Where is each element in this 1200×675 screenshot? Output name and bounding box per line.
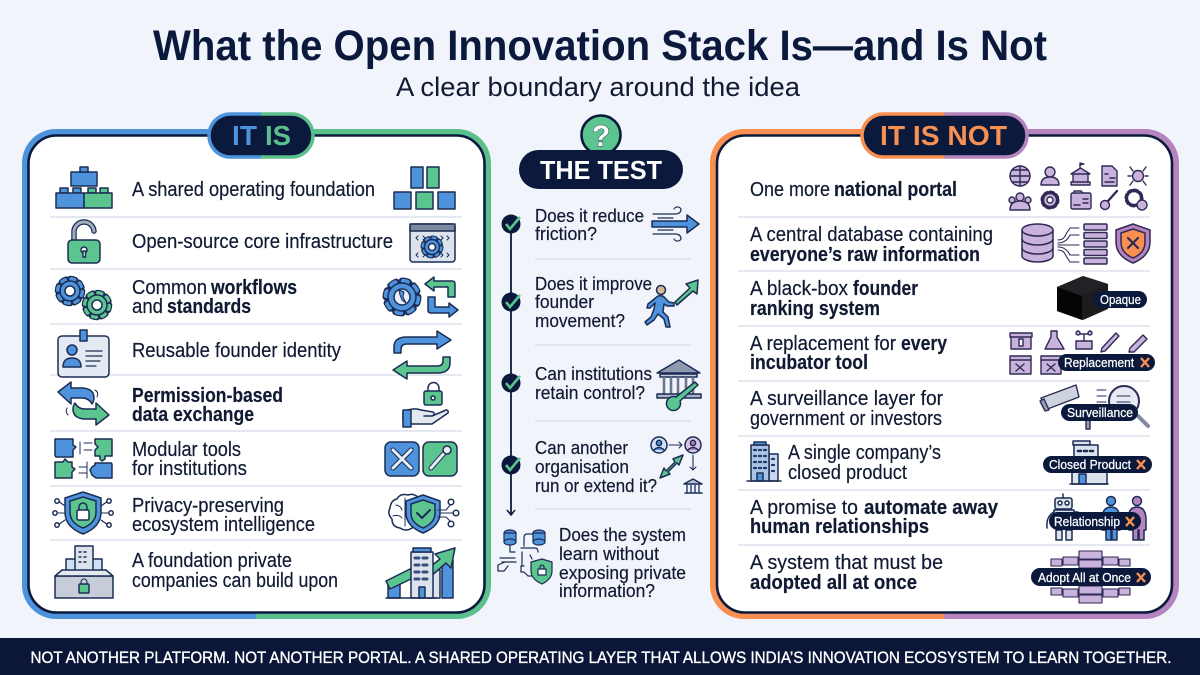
text: central database: everyone’s raw information <box>750 244 980 266</box>
icon: company tower <box>747 442 781 481</box>
icon: data flow to shield <box>498 530 552 584</box>
text: surveillance layer: A surveillance layer for <box>750 388 943 410</box>
heading: it is not: IT IS NOT <box>880 120 1007 151</box>
icon: bank with key <box>657 360 701 411</box>
icon: black box <box>1057 276 1108 320</box>
text: replacement for every tool: incubator tool <box>750 352 868 374</box>
icon: organisation handoff <box>651 437 702 493</box>
icon: founder id card <box>58 330 109 377</box>
icon: hand holding lock <box>403 382 448 427</box>
icon: database to shield <box>1022 224 1150 264</box>
pill: opaque: Opaque <box>1100 293 1141 307</box>
text: replacement for every tool: every <box>901 333 948 355</box>
text: national portal: national portal <box>834 179 957 201</box>
text: adopted all at once: A system that must be <box>750 552 943 574</box>
text: automate away relationships: A promise to <box>750 497 858 519</box>
text: surveillance layer: government or investors <box>750 408 942 430</box>
icon: two gears <box>58 279 109 317</box>
text: improve founder movement: founder <box>535 291 594 312</box>
icon: tool tiles <box>385 442 457 476</box>
text: reduce friction: Does it reduce <box>535 205 644 226</box>
icon: running founder with arrow <box>645 280 698 327</box>
text: privacy-preserving intelligence: Privacy-preserving <box>132 495 284 517</box>
text: foundation private companies: A foundation private <box>132 550 292 572</box>
icon: puzzle modules <box>55 439 112 478</box>
icon: wind arrow <box>652 207 699 241</box>
text: another organisation: organisation <box>535 456 629 477</box>
icon: blocks and towers <box>394 167 455 209</box>
text: permission-based data exchange: Permission-based <box>132 385 283 407</box>
pill: closed product: Closed Product <box>1049 458 1131 472</box>
panel: it is not <box>710 114 1179 619</box>
panel: it is <box>22 114 491 619</box>
text: improve founder movement: movement? <box>535 310 625 331</box>
text: learn without exposing: exposing private <box>559 562 686 583</box>
icon: camera and magnifier <box>1040 385 1148 429</box>
pill: adopt all at once: Adopt All at Once <box>1038 571 1131 585</box>
text: learn without exposing: information? <box>559 580 655 601</box>
text: another organisation: Can another <box>535 437 628 458</box>
text: reduce friction: friction? <box>535 223 597 244</box>
text: modular tools: Modular tools <box>132 439 241 461</box>
text: privacy-preserving intelligence: ecosystem intelligence <box>132 514 315 536</box>
title: What the Open Innovation Stack Is—and Is Not <box>153 22 1047 70</box>
pill: replacement <box>1058 354 1155 371</box>
text: black-box ranking: A black-box <box>750 278 848 300</box>
text: learn without exposing: learn without <box>559 543 659 564</box>
subtitle: A clear boundary around the idea <box>396 72 801 102</box>
text: common workflows: workflows <box>210 277 297 299</box>
icon: question mark badge <box>582 116 620 154</box>
footer banner <box>0 638 1200 675</box>
pill: closed product <box>1043 456 1152 473</box>
text: modular tools: for institutions <box>132 458 247 480</box>
heading: the test: THE TEST <box>540 155 662 185</box>
icon: question mark badge: ? <box>592 120 610 153</box>
text: closed product: closed product <box>788 462 907 484</box>
heading: it is not <box>862 114 1027 157</box>
text: replacement for every tool: A replacement for <box>750 333 896 355</box>
icon: open lock <box>68 222 100 263</box>
icon: closed building <box>1070 441 1108 484</box>
text: open-source core: Open-source core infrastructure <box>132 231 393 253</box>
heading: it is: IS <box>265 120 291 151</box>
icon: curved permission arrows <box>58 382 109 425</box>
pill: replacement: Replacement <box>1064 356 1134 370</box>
icon: buildings on locked base <box>55 546 113 598</box>
icon: server stack <box>1051 551 1130 603</box>
text: central database: A central database containing <box>750 224 993 246</box>
text: common workflows: and <box>132 296 163 318</box>
pill: opaque <box>1094 291 1147 308</box>
text: closed product: A single company’s <box>788 442 941 464</box>
text: shared operating foundation: A shared operating foundation <box>132 179 375 201</box>
heading: it is <box>209 114 313 157</box>
icon: code window with gear <box>410 224 455 262</box>
text: retain control: Can institutions <box>535 363 652 384</box>
heading: the test <box>519 150 683 189</box>
timeline with checks <box>502 214 520 515</box>
text: learn without exposing: Does the system <box>559 524 686 545</box>
icon group: incubator tools <box>1010 331 1147 374</box>
icon: privacy shield <box>53 492 113 534</box>
text: common workflows: Common <box>132 277 207 299</box>
pill: relationship <box>1049 512 1141 530</box>
icon: building with growth arrow <box>386 548 455 598</box>
text: adopted all at once: adopted all at once <box>750 572 917 594</box>
text: permission-based data exchange: data exchange <box>132 404 254 426</box>
icon: exchange arrows <box>393 331 451 379</box>
icon: brain and shield <box>389 494 459 533</box>
heading: it is: IT <box>232 120 257 151</box>
pill: surveillance: Surveillance <box>1067 406 1133 420</box>
icon grid: portal services <box>1009 163 1148 210</box>
text: automate away relationships: automate away <box>864 497 999 519</box>
icon: building blocks <box>56 167 112 208</box>
text: black-box ranking: ranking system <box>750 298 880 320</box>
text: foundation private companies: companies can build upon <box>132 570 338 592</box>
text: reusable founder identity: Reusable founder identity <box>132 340 341 362</box>
text: another organisation: run or extend it? <box>535 475 657 496</box>
pill: relationship: Relationship <box>1054 515 1120 529</box>
pill: adopt all at once <box>1031 568 1151 586</box>
panel: the test <box>498 116 702 601</box>
icon: gear with looping arrows <box>386 277 458 317</box>
text: common workflows: standards <box>167 296 251 318</box>
text: black-box ranking: founder <box>853 278 918 300</box>
text: improve founder movement: Does it improve <box>535 273 652 294</box>
text: retain control: retain control? <box>535 382 645 403</box>
text: national portal: One more <box>750 179 830 201</box>
text: automate away relationships: human relationships <box>750 516 929 538</box>
icon: robot and people <box>1047 494 1146 540</box>
